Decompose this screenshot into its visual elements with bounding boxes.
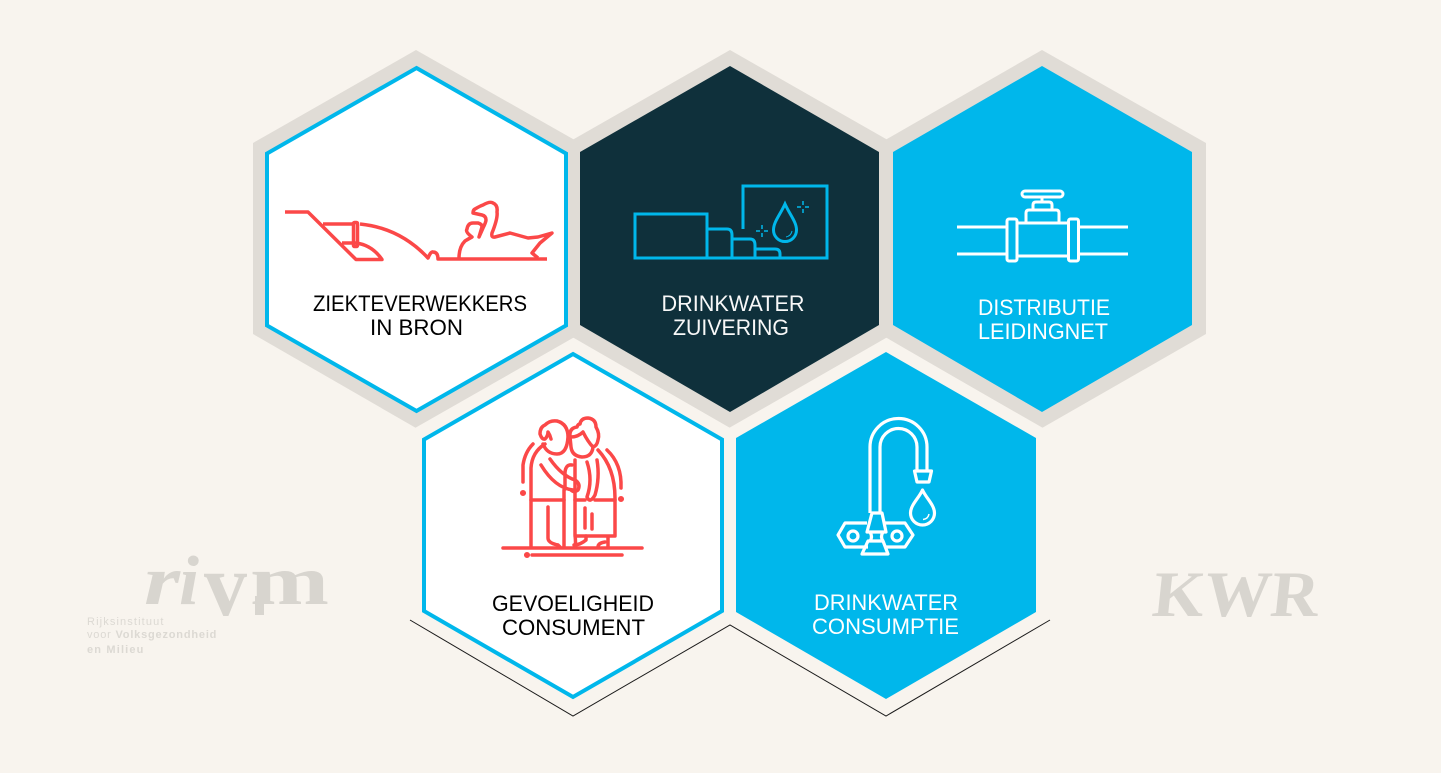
icon: treatment basins with water drop (635, 186, 827, 258)
logo subtitle: Rijksinstituut (87, 616, 164, 628)
panel: drinkwater consumptie (736, 352, 1036, 699)
label: drinkwater zuivering (662, 291, 804, 340)
panel: gevoeligheid consument (424, 354, 722, 697)
logo: rivm: i (179, 543, 200, 620)
panel: drinkwater zuivering (580, 66, 879, 412)
grey backing of top hexagon row (253, 50, 1206, 428)
label: ziekteverwekkers in bron: IN BRON (370, 315, 463, 340)
baseline zigzag under bottom hexagons (410, 620, 1050, 716)
label: gevoeligheid consument: CONSUMENT (502, 615, 645, 640)
panel: distributie leidingnet (893, 66, 1192, 412)
label: drinkwater zuivering: ZUIVERING (673, 315, 789, 340)
logo: rivm: m (250, 543, 329, 620)
icon: tap with drop (838, 418, 934, 554)
logo: rivm: v (204, 536, 247, 635)
panel: ziekteverwekkers in bron (267, 68, 566, 411)
logo: rivm: r (144, 543, 181, 620)
label: ziekteverwekkers in bron (313, 291, 527, 340)
icon: sewage pipe and duck (285, 202, 552, 260)
label: ziekteverwekkers in bron: ZIEKTEVERWEKKERS (313, 291, 527, 316)
label: drinkwater consumptie: DRINKWATER (814, 590, 958, 615)
label: distributie leidingnet: LEIDINGNET (978, 319, 1108, 344)
logo: rivm (87, 536, 329, 656)
label: drinkwater consumptie (812, 590, 959, 639)
label: drinkwater zuivering: DRINKWATER (662, 291, 804, 316)
logo subtitle: voor Volksgezondheid (87, 629, 217, 641)
label: gevoeligheid consument: GEVOELIGHEID (492, 591, 654, 616)
label: distributie leidingnet (978, 295, 1110, 344)
icon: elderly couple (503, 418, 642, 556)
icon: pipe with valve (957, 191, 1128, 261)
logo subtitle: en Milieu (87, 644, 144, 656)
label: gevoeligheid consument (492, 591, 654, 640)
label: distributie leidingnet: DISTRIBUTIE (978, 295, 1110, 320)
label: drinkwater consumptie: CONSUMPTIE (812, 614, 959, 639)
logo: KWR: KWR (1149, 559, 1324, 631)
logo subtitle (87, 616, 217, 656)
cream gap around bottom hexagons (408, 338, 1050, 716)
